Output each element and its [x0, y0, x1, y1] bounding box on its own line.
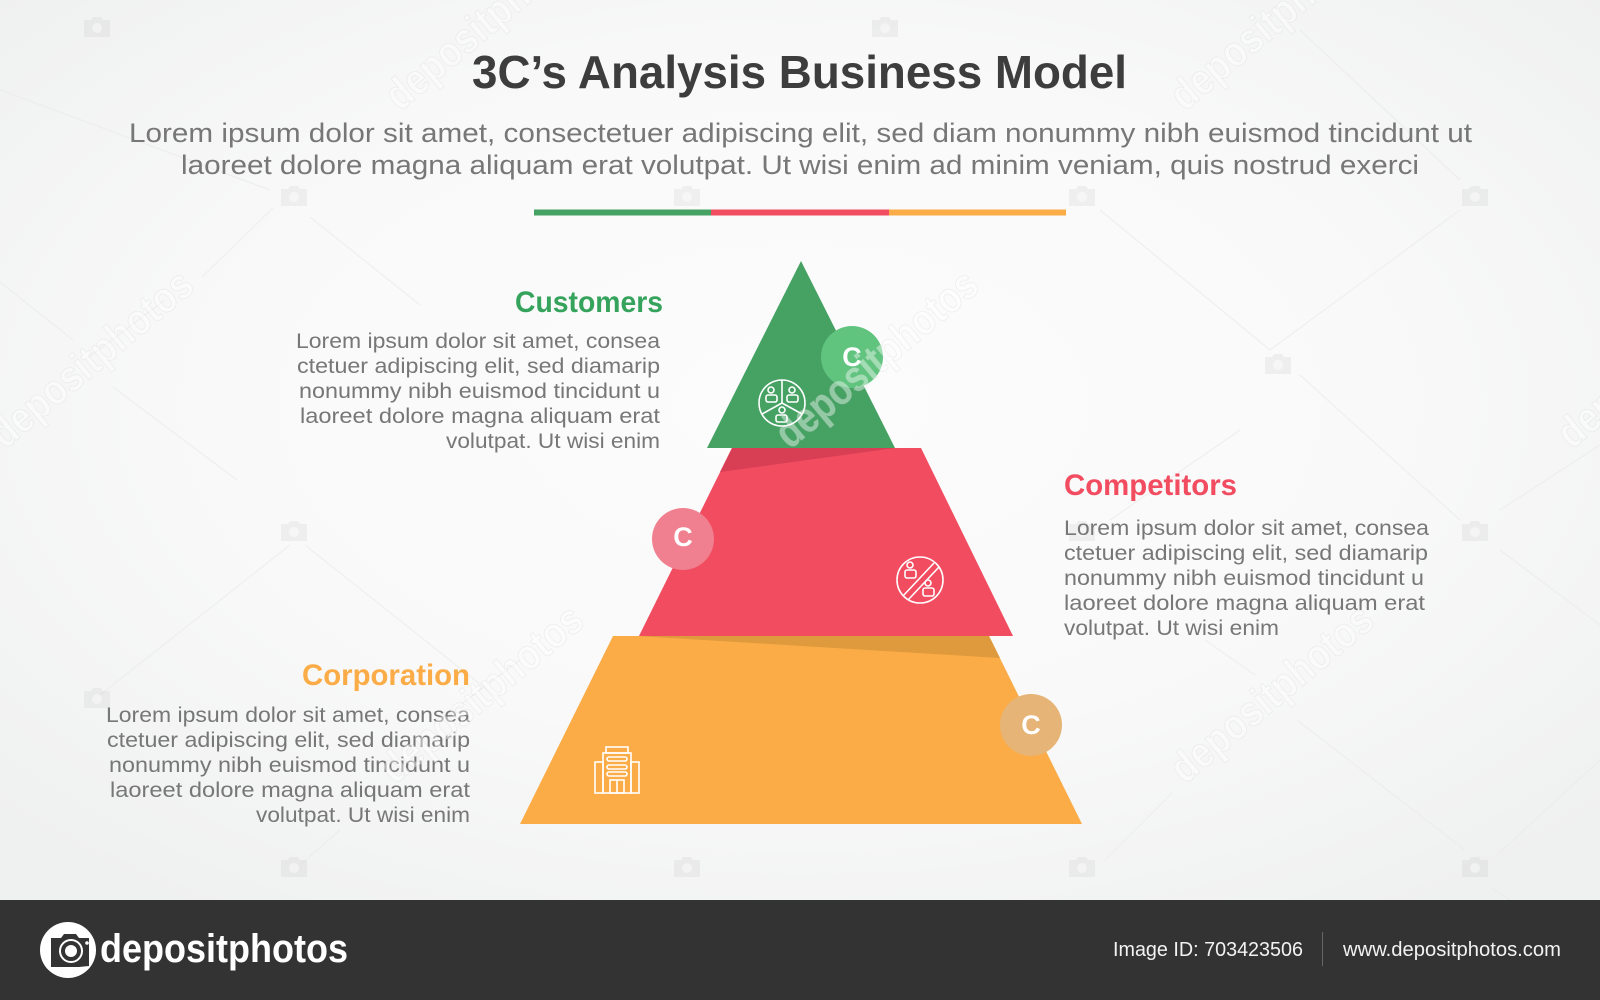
watermarks: depositphotos — [1161, 595, 1383, 793]
subtitle: laoreet dolore magna aliquam erat volutpat. Ut wisi enim ad minim veniam, quis nostrud exerci — [181, 150, 1419, 180]
tier: customers — [707, 261, 895, 448]
tier shadow: competitors — [720, 448, 895, 472]
brand wordmark: depositphotos — [100, 927, 348, 971]
text block: customers — [296, 329, 660, 453]
tier: corporation — [520, 636, 1082, 824]
heading: customers: Customers — [515, 286, 663, 319]
heading: competitors: Competitors — [1064, 469, 1237, 502]
icon: corporation building — [595, 747, 639, 793]
tier: competitors — [639, 448, 1013, 636]
footer bar — [0, 900, 1600, 1000]
text block: competitors: ctetuer adipiscing elit, sed diamarip — [1064, 541, 1428, 565]
text block: corporation: ctetuer adipiscing elit, sed diamarip — [107, 728, 470, 752]
text block: customers: ctetuer adipiscing elit, sed diamarip — [297, 354, 660, 378]
text block: customers: nonummy nibh euismod tincidunt u — [299, 379, 660, 403]
text block: customers: laoreet dolore magna aliquam erat — [300, 404, 660, 428]
text block: competitors — [1064, 516, 1429, 640]
pyramid — [520, 261, 1082, 824]
text block: competitors: laoreet dolore magna aliquam erat — [1064, 591, 1425, 615]
subtitle: Lorem ipsum dolor sit amet, consectetuer adipiscing elit, sed diam nonummy nibh euismod tincidunt ut — [129, 118, 1473, 148]
icon: customers segments — [759, 380, 805, 426]
badge: customers C: C — [842, 342, 862, 372]
text block: corporation — [106, 703, 470, 827]
text block: competitors: Lorem ipsum dolor sit amet, consea — [1064, 516, 1429, 540]
website: www.depositphotos.com — [1342, 939, 1561, 961]
badge: corporation C — [1000, 694, 1062, 756]
badge: customers C — [821, 326, 883, 388]
text block: customers: volutpat. Ut wisi enim — [446, 429, 660, 453]
text block: corporation: volutpat. Ut wisi enim — [256, 803, 470, 827]
text block: corporation: laoreet dolore magna aliquam erat — [110, 778, 470, 802]
badge: competitors C: C — [673, 522, 693, 552]
icon: competitors split — [897, 557, 943, 603]
panel: corporation — [106, 659, 470, 827]
watermarks: depositphotos — [766, 260, 988, 458]
tri-colour divider — [534, 210, 1066, 216]
text block: customers: Lorem ipsum dolor sit amet, consea — [296, 329, 660, 353]
watermarks — [0, 0, 1600, 793]
watermarks: depositphotos — [371, 595, 593, 793]
image id: Image ID: 703423506 — [1113, 939, 1303, 961]
icon: camera logo — [40, 922, 96, 978]
tier shadow: corporation — [638, 636, 1000, 658]
panel: customers — [296, 286, 663, 453]
heading: corporation: Corporation — [302, 659, 470, 692]
text block: competitors: volutpat. Ut wisi enim — [1064, 616, 1279, 640]
text block: corporation: Lorem ipsum dolor sit amet, consea — [106, 703, 470, 727]
text block: competitors: nonummy nibh euismod tincidunt u — [1064, 566, 1424, 590]
panel: competitors — [1064, 469, 1429, 640]
title: 3C’s Analysis Business Model — [472, 46, 1127, 98]
badge: corporation C: C — [1021, 710, 1041, 740]
badge: competitors C — [652, 508, 714, 570]
subtitle — [129, 118, 1473, 180]
text block: corporation: nonummy nibh euismod tincidunt u — [109, 753, 470, 777]
